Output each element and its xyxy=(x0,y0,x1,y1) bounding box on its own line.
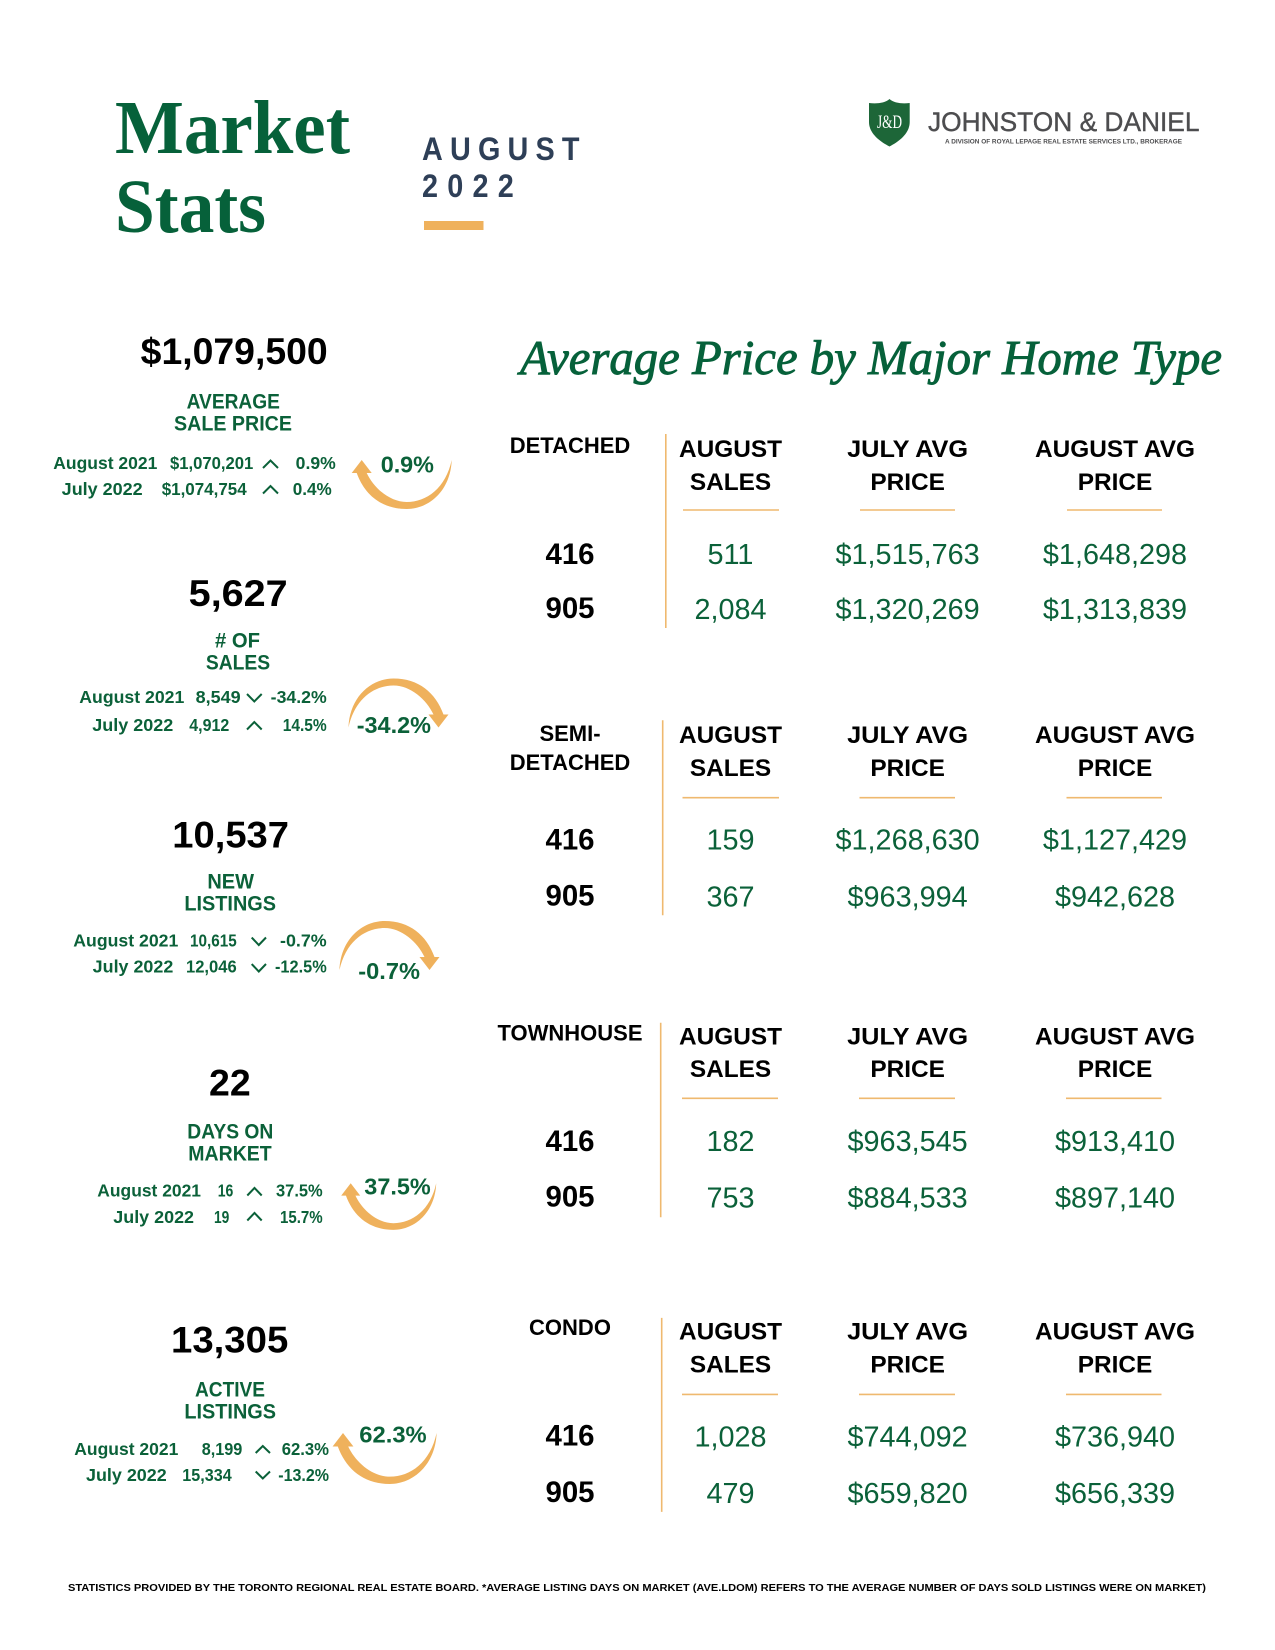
column headers: AUGUST xyxy=(679,1319,782,1346)
comparison rows: 62.3% xyxy=(282,1439,329,1459)
home type label: CONDO xyxy=(529,1315,611,1340)
comparison rows: July 2022 xyxy=(113,1207,194,1227)
logo: Johnston & Daniel: A DIVISION OF ROYAL LEPAGE REAL ESTATE SERVICES LTD., BROKERAGE xyxy=(945,138,1183,145)
comparison rows: $1,074,754 xyxy=(162,479,247,499)
home type label xyxy=(510,721,630,775)
comparison rows: August 2021 xyxy=(97,1181,201,1201)
label: DAYS ON xyxy=(187,1119,273,1143)
panel: number of sales xyxy=(79,573,449,738)
row 416: 1,028 xyxy=(694,1421,767,1453)
row 416: $744,092 xyxy=(848,1421,968,1453)
comparison rows: 15,334 xyxy=(182,1465,232,1485)
icon: shield: J&D xyxy=(877,112,902,133)
comparison rows: 4,912 xyxy=(189,715,230,735)
column headers: PRICE xyxy=(870,1351,945,1378)
panel: new listings xyxy=(73,815,440,984)
row 905 xyxy=(545,1476,1175,1510)
column headers: AUGUST AVG xyxy=(1035,1319,1195,1346)
row 416 xyxy=(545,538,1187,571)
row 416: 159 xyxy=(706,824,755,856)
comparison rows: -34.2% xyxy=(271,687,327,707)
row 905: 2,084 xyxy=(694,594,767,626)
column headers: PRICE xyxy=(870,755,945,782)
accent bar xyxy=(424,221,484,230)
row 416 xyxy=(545,824,1187,856)
panel: average sale price xyxy=(53,331,452,509)
row 905: $1,320,269 xyxy=(836,594,980,626)
panel: active listings xyxy=(74,1319,437,1485)
arrow: down xyxy=(340,921,440,970)
row 416: $736,940 xyxy=(1055,1421,1175,1453)
label xyxy=(184,869,276,916)
label: LISTINGS xyxy=(184,1399,276,1423)
change value: -0.7% xyxy=(358,958,420,984)
column headers: JULY AVG xyxy=(847,436,968,463)
column headers: AUGUST xyxy=(679,436,782,463)
comparison rows: 8,549 xyxy=(196,687,241,707)
row 416: 416 xyxy=(545,538,595,571)
column headers: PRICE xyxy=(1078,755,1152,782)
row 416: $1,268,630 xyxy=(836,824,980,856)
table: townhouse xyxy=(498,1021,1195,1217)
table: detached xyxy=(510,433,1195,628)
row 416 xyxy=(545,1419,1175,1453)
column headers: SALES xyxy=(690,469,771,496)
comparison rows: -13.2% xyxy=(278,1465,329,1485)
comparison rows: August 2021 xyxy=(53,453,158,473)
row 416: $1,515,763 xyxy=(836,539,980,571)
row 905: 753 xyxy=(706,1182,755,1214)
row 416: 182 xyxy=(706,1126,755,1158)
comparison rows: $1,070,201 xyxy=(170,453,254,473)
home type label: SEMI- xyxy=(539,721,601,746)
row 905 xyxy=(545,880,1175,914)
comparison rows: 8,199 xyxy=(202,1439,243,1459)
comparison rows: 12,046 xyxy=(186,957,237,977)
row 905: 905 xyxy=(545,592,595,625)
column headers: JULY AVG xyxy=(847,1023,968,1050)
comparison rows: July 2022 xyxy=(92,715,174,735)
row 905 xyxy=(545,592,1187,626)
row 905: 905 xyxy=(545,880,595,913)
column headers: JULY AVG xyxy=(847,722,968,749)
row 905: $942,628 xyxy=(1055,882,1175,914)
label: LISTINGS xyxy=(184,892,276,916)
column headers: SALES xyxy=(690,1351,771,1378)
logo: Johnston & Daniel: JOHNSTON & DANIEL xyxy=(928,107,1200,137)
row 416: $963,545 xyxy=(848,1126,968,1158)
row 416: $1,127,429 xyxy=(1043,824,1187,856)
row 905: $1,313,839 xyxy=(1043,594,1187,626)
big number: 22 xyxy=(209,1063,251,1104)
comparison rows: August 2021 xyxy=(73,931,179,951)
home type label: DETACHED xyxy=(510,433,630,458)
label: SALE PRICE xyxy=(174,412,292,436)
column headers: SALES xyxy=(690,1056,771,1083)
label: MARKET xyxy=(188,1142,272,1166)
icon: shield xyxy=(869,99,910,146)
comparison rows: 15.7% xyxy=(280,1207,323,1227)
big number: 10,537 xyxy=(172,815,289,856)
change value: 62.3% xyxy=(359,1422,427,1448)
row 905: 905 xyxy=(545,1476,595,1509)
row 416 xyxy=(545,1125,1175,1158)
change value: 0.9% xyxy=(381,452,434,478)
big number: 5,627 xyxy=(189,573,288,614)
comparison rows xyxy=(74,1439,329,1485)
row 416: 416 xyxy=(545,824,595,856)
column headers: PRICE xyxy=(1078,469,1152,496)
column headers: AUGUST xyxy=(679,1023,782,1050)
comparison rows: 19 xyxy=(214,1207,230,1227)
big number: 13,305 xyxy=(171,1319,288,1360)
table: condo xyxy=(529,1315,1195,1512)
arrow: up xyxy=(341,1183,436,1230)
heading: average price by major home type: Average Price by Major Home Type xyxy=(517,330,1222,385)
row 905: 479 xyxy=(706,1478,755,1510)
row 905: $963,994 xyxy=(848,882,968,914)
comparison rows xyxy=(97,1181,323,1227)
label xyxy=(174,389,292,436)
column headers: AUGUST AVG xyxy=(1035,436,1195,463)
row 905: $659,820 xyxy=(848,1478,968,1510)
row 905: $897,140 xyxy=(1055,1182,1175,1214)
row 905 xyxy=(545,1180,1175,1214)
change value: -34.2% xyxy=(357,712,431,738)
column headers: SALES xyxy=(690,755,771,782)
label: ACTIVE xyxy=(195,1378,265,1402)
comparison rows: 14.5% xyxy=(283,715,327,735)
column headers xyxy=(679,722,1195,782)
comparison rows: July 2022 xyxy=(93,957,174,977)
label: NEW xyxy=(207,869,255,893)
title: Market xyxy=(115,86,350,170)
comparison rows: July 2022 xyxy=(62,479,143,499)
table: semi-detached xyxy=(510,720,1195,915)
comparison rows: August 2021 xyxy=(74,1439,179,1459)
row 416: 416 xyxy=(545,1419,595,1452)
comparison rows: 0.9% xyxy=(296,453,336,473)
title: Stats xyxy=(115,165,266,249)
date heading xyxy=(422,132,580,204)
comparison rows xyxy=(53,453,336,499)
title xyxy=(115,86,350,249)
comparison rows: August 2021 xyxy=(79,687,185,707)
row 416: 511 xyxy=(708,539,753,571)
column headers: AUGUST AVG xyxy=(1035,1023,1195,1050)
column headers: JULY AVG xyxy=(847,1319,968,1346)
home type label: TOWNHOUSE xyxy=(498,1021,642,1046)
label: # OF xyxy=(215,628,260,652)
label: SALES xyxy=(206,650,270,674)
comparison rows: 10,615 xyxy=(190,931,237,951)
date heading: AUGUST xyxy=(422,132,580,167)
comparison rows xyxy=(73,931,327,977)
column headers: PRICE xyxy=(870,1056,945,1083)
column headers: AUGUST xyxy=(679,722,782,749)
column headers xyxy=(679,1319,1195,1378)
label xyxy=(206,628,270,674)
comparison rows xyxy=(79,687,327,735)
comparison rows: -0.7% xyxy=(280,931,327,951)
comparison rows: -12.5% xyxy=(275,957,327,977)
arrow: up xyxy=(352,460,452,509)
label: AVERAGE xyxy=(187,389,280,413)
column headers: PRICE xyxy=(1078,1056,1152,1083)
comparison rows: 16 xyxy=(218,1181,234,1201)
arrow: down xyxy=(348,678,448,728)
column headers: PRICE xyxy=(1078,1351,1152,1378)
comparison rows: 37.5% xyxy=(276,1181,323,1201)
label xyxy=(184,1378,276,1423)
logo: Johnston & Daniel xyxy=(869,99,1200,146)
row 905: $656,339 xyxy=(1055,1478,1175,1510)
row 416: $1,648,298 xyxy=(1043,539,1187,571)
column headers xyxy=(679,1023,1195,1083)
panel: days on market xyxy=(97,1063,436,1230)
column headers xyxy=(679,436,1195,496)
column headers: PRICE xyxy=(870,469,945,496)
column headers: AUGUST AVG xyxy=(1035,722,1195,749)
row 905: 905 xyxy=(545,1180,595,1213)
row 905: 367 xyxy=(706,882,755,914)
row 905: $884,533 xyxy=(848,1182,968,1214)
comparison rows: 0.4% xyxy=(293,479,332,499)
big number: $1,079,500 xyxy=(141,331,328,372)
arrow: up xyxy=(333,1433,437,1484)
change value: 37.5% xyxy=(364,1173,431,1199)
label xyxy=(187,1119,273,1166)
date heading: 2022 xyxy=(422,169,514,204)
row 416: $913,410 xyxy=(1055,1126,1175,1158)
row 416: 416 xyxy=(545,1125,595,1158)
footer note: STATISTICS PROVIDED BY THE TORONTO REGIONAL REAL ESTATE BOARD. *AVERAGE LISTING DAYS ON MARKET (AVE.LDOM) REFERS TO THE AVERAGE NUMBER OF DAYS SOLD LISTINGS WERE ON MARKET) xyxy=(68,1582,1206,1594)
comparison rows: July 2022 xyxy=(86,1465,167,1485)
home type label: DETACHED xyxy=(510,750,630,775)
